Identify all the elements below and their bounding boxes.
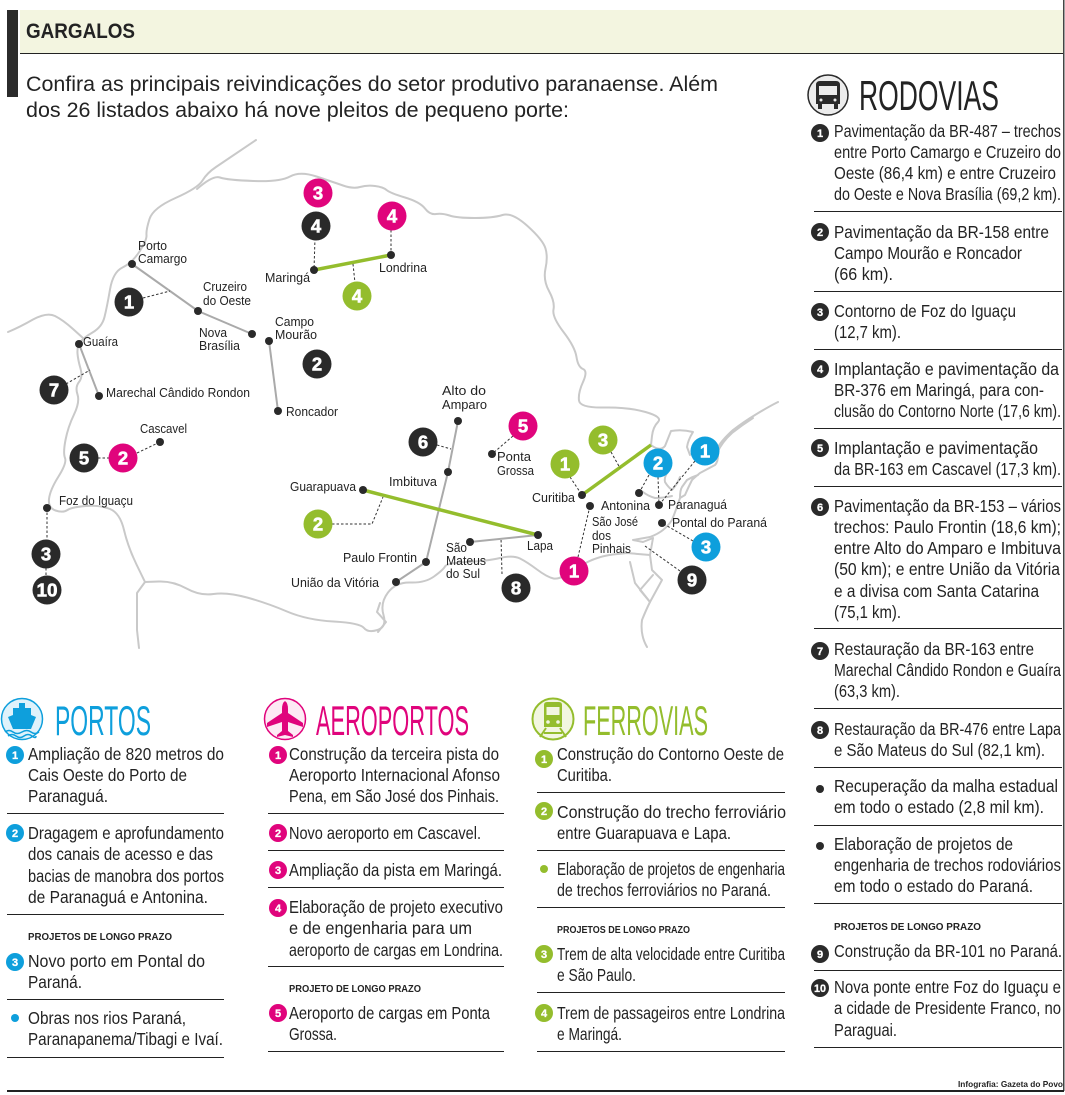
- item 1: Cais Oeste do Porto de: [28, 765, 187, 785]
- item 3: (12,7 km).: [834, 322, 901, 342]
- routes: [79, 255, 651, 582]
- item 1: [811, 121, 1061, 204]
- state and coast borders: [8, 140, 778, 648]
- city labels: São: [446, 540, 467, 555]
- item 4: aeroporto de cargas em Londrina.: [289, 940, 503, 960]
- item 1: [535, 744, 784, 785]
- airport number badges: [108, 178, 588, 586]
- city labels: Cascavel: [140, 421, 187, 436]
- city labels: Antonina: [601, 498, 651, 513]
- item 1: 1: [817, 128, 823, 140]
- item 4: Trem de passageiros entre Londrina: [557, 1003, 785, 1023]
- item 2: 2: [817, 227, 823, 239]
- item 3: Paraná.: [28, 972, 82, 992]
- item 1: Pena, em São José dos Pinhais.: [289, 786, 499, 806]
- map of Paraná: [8, 140, 778, 648]
- item 2: de Paranaguá e Antonina.: [28, 887, 208, 907]
- item 4: 4: [817, 364, 824, 376]
- road number badges: 10: [36, 580, 58, 600]
- city labels: Porto: [138, 238, 167, 253]
- rail number badges: 1: [560, 454, 570, 474]
- item: projetos ferroviários: [540, 859, 785, 900]
- city labels: Roncador: [286, 404, 339, 419]
- road number badges: 8: [511, 578, 521, 598]
- item 2: dos canais de acesso e das: [28, 844, 213, 864]
- city labels: São José: [592, 514, 638, 529]
- city labels: Lapa: [527, 538, 554, 553]
- item 3: 3: [275, 865, 281, 877]
- road number badges: 2: [312, 354, 322, 374]
- item 7: (63,3 km).: [834, 681, 900, 701]
- item 2: 2: [275, 828, 281, 840]
- item 1: 1: [275, 750, 281, 762]
- item 1: 1: [12, 750, 18, 762]
- item 1: Construção do Contorno Oeste de: [557, 744, 784, 764]
- item 1: Curitiba.: [557, 765, 612, 785]
- airport number badges: 2: [118, 448, 128, 468]
- city labels: Paranaguá: [668, 497, 728, 512]
- item: projetos rodoviários: [816, 834, 1061, 896]
- item 8: [811, 719, 1061, 760]
- item 4: [811, 359, 1061, 421]
- item 1: [6, 744, 224, 806]
- city labels: do Oeste: [203, 293, 251, 308]
- item 4: e de engenharia para um: [289, 918, 472, 938]
- item 1: Construção da terceira pista do: [289, 744, 499, 764]
- icon: plane: [264, 698, 306, 740]
- city labels: União da Vitória: [291, 575, 380, 590]
- item 2: 2: [541, 806, 547, 818]
- item 3: Ampliação da pista em Maringá.: [289, 860, 502, 880]
- city labels: Amparo: [442, 397, 487, 412]
- item 3: [6, 951, 205, 992]
- road number badges: 4: [311, 216, 322, 236]
- item: obras nos rios: Obras nos rios Paraná,: [28, 1008, 186, 1028]
- subheading: PROJETOS DE LONGO PRAZO: [28, 931, 172, 943]
- item 4: 4: [541, 1008, 548, 1020]
- city labels: Alto do: [442, 383, 486, 398]
- city labels: Guaíra: [83, 334, 119, 349]
- heading: portos: PORTOS: [55, 697, 151, 744]
- item 3: Trem de alta velocidade entre Curitiba: [557, 944, 785, 964]
- port number badges: [644, 436, 720, 562]
- item: projetos rodoviários: em todo o estado do Paraná.: [834, 876, 1033, 896]
- city labels: Imbituva: [389, 474, 438, 489]
- item 5: Grossa.: [289, 1024, 337, 1044]
- item 8: 8: [817, 725, 823, 737]
- item 2: Novo aeroporto em Cascavel.: [289, 823, 481, 843]
- item 3: 3: [541, 949, 547, 961]
- item 6: e a divisa com Santa Catarina: [834, 581, 1039, 601]
- city labels: Ponta: [497, 449, 532, 464]
- item 5: Aeroporto de cargas em Ponta: [289, 1003, 490, 1023]
- item 7: Restauração da BR-163 entre: [834, 639, 1034, 659]
- item 7: 7: [817, 646, 823, 658]
- leader lines: [46, 230, 695, 578]
- airport number badges: 4: [387, 206, 398, 226]
- item: obras nos rios: [11, 1008, 223, 1049]
- item 3: 3: [817, 307, 823, 319]
- city labels: Campo: [275, 314, 314, 329]
- item 6: (75,1 km).: [834, 602, 901, 622]
- subheading: PROJETO DE LONGO PRAZO: [289, 983, 421, 995]
- airport number badges: 1: [569, 560, 579, 582]
- icon: train: [532, 698, 574, 740]
- item 10: Paraguai.: [834, 1020, 897, 1040]
- item 4: [535, 1003, 785, 1044]
- road number badges: 6: [418, 432, 428, 452]
- subheading: PROJETOS DE LONGO PRAZO: [557, 924, 690, 936]
- city labels: Cruzeiro: [203, 279, 247, 294]
- item 2: [6, 823, 224, 907]
- item 2: Construção do trecho ferroviário: [557, 802, 786, 822]
- item: projetos ferroviários: Elaboração de projetos de engenharia: [557, 859, 785, 879]
- rules: rodovias: [814, 212, 1062, 1048]
- rail number badges: 3: [598, 430, 608, 450]
- item 7: [811, 639, 1061, 701]
- item 2: entre Guarapuava e Lapa.: [557, 823, 731, 843]
- item 1: 1: [541, 754, 547, 766]
- item: malha estadual: [816, 776, 1058, 817]
- item 4: 4: [275, 903, 282, 915]
- item 2: Dragagem e aprofundamento: [28, 823, 224, 843]
- item 2: bacias de manobra dos portos: [28, 866, 224, 886]
- intro text: dos 26 listados abaixo há nove pleitos de pequeno porte:: [26, 99, 569, 122]
- item 2: Campo Mourão e Roncador: [834, 243, 1022, 263]
- city labels: Londrina: [379, 260, 428, 275]
- rules: aeroportos: [268, 814, 504, 1052]
- road number badges: 9: [687, 570, 697, 590]
- port number badges: 2: [653, 452, 663, 474]
- item 5: 5: [275, 1008, 281, 1020]
- city labels: Guarapuava: [290, 479, 357, 494]
- item 2: [535, 802, 786, 843]
- city labels: Brasília: [199, 338, 241, 353]
- city labels: dos: [592, 528, 611, 543]
- airport number badges: 3: [313, 182, 323, 204]
- item 1: Paranaguá.: [28, 786, 108, 806]
- item 10: [811, 977, 1061, 1040]
- rail number badges: 4: [352, 286, 363, 306]
- item 5: [269, 1003, 490, 1044]
- icon: bus: [808, 75, 848, 115]
- item 3: Novo porto em Pontal do: [28, 951, 205, 971]
- item 10: 10: [814, 983, 826, 995]
- item: malha estadual: em todo o estado (2,8 mil km).: [834, 797, 1044, 817]
- panel: portos: [2, 697, 224, 1049]
- item 5: [811, 438, 1061, 479]
- port number badges: 3: [701, 536, 711, 558]
- item 3: 3: [12, 957, 18, 969]
- city labels: [59, 238, 768, 590]
- city labels: Nova: [199, 325, 228, 340]
- city labels: do Sul: [446, 566, 480, 581]
- icon: ship: [2, 698, 42, 740]
- city labels: Camargo: [138, 251, 187, 266]
- item 1: [269, 744, 500, 806]
- item 6: [811, 496, 1061, 622]
- item 4: Elaboração de projeto executivo: [289, 897, 503, 917]
- city labels: Grossa: [497, 463, 535, 478]
- item: obras nos rios: Paranapanema/Tibagi e Ivaí.: [28, 1029, 223, 1049]
- heading: aeroportos: AEROPORTOS: [316, 697, 469, 744]
- item 9: 9: [817, 949, 823, 961]
- panel: ferrovias: [532, 697, 786, 1044]
- item: projetos ferroviários: de trechos ferroviários no Paraná.: [557, 880, 771, 900]
- city labels: Mourão: [275, 327, 317, 342]
- city labels: Mateus: [446, 553, 486, 568]
- panel: rodovias: [808, 72, 1062, 1040]
- item 5: Implantação e pavimentação: [834, 438, 1038, 458]
- item: projetos rodoviários: Elaboração de projetos de: [834, 834, 1013, 854]
- road number badges: 3: [41, 544, 51, 564]
- city labels: Curitiba: [532, 490, 576, 505]
- item 3: e São Paulo.: [557, 965, 636, 985]
- bottom rule: [7, 1090, 1064, 1092]
- intro text: Confira as principais reivindicações do setor produtivo paranaense. Além: [26, 73, 718, 96]
- city labels: Maringá: [265, 270, 311, 285]
- road number badges: 5: [79, 448, 89, 468]
- item 3: Contorno de Foz do Iguaçu: [834, 301, 1016, 321]
- item 6: 6: [817, 502, 823, 514]
- rail number badges: [304, 282, 618, 538]
- item 1: Ampliação de 820 metros do: [28, 744, 224, 764]
- item 1: Aeroporto Internacional Afonso: [289, 765, 500, 785]
- city labels: Paulo Frontin: [343, 550, 417, 565]
- heading: ferrovias: FERROVIAS: [583, 697, 708, 744]
- rules: portos: [7, 814, 224, 1058]
- road number badges: [32, 212, 706, 604]
- road number badges: 1: [124, 292, 134, 312]
- item 4: [269, 897, 503, 960]
- city labels: Marechal Cândido Rondon: [106, 385, 250, 400]
- item 3: [535, 944, 785, 985]
- city labels: Foz do Iguaçu: [59, 493, 133, 508]
- city labels: Pinhais: [592, 541, 631, 556]
- rules: ferrovias: [537, 792, 785, 1052]
- panel: aeroportos: [264, 697, 503, 1044]
- item 2: 2: [12, 828, 18, 840]
- airport number badges: 5: [518, 416, 528, 436]
- subheading: PROJETOS DE LONGO PRAZO: [834, 921, 981, 933]
- title: GARGALOS: [26, 20, 135, 43]
- rail number badges: 2: [313, 514, 323, 534]
- item 2: (66 km).: [834, 264, 893, 284]
- intro text: [26, 73, 718, 122]
- item 5: 5: [817, 443, 823, 455]
- city dots: [43, 251, 666, 586]
- credit: Infografia: Gazeta do Povo: [958, 1079, 1063, 1089]
- road number badges: 7: [49, 380, 59, 400]
- item 4: e Maringá.: [557, 1024, 622, 1044]
- port number badges: 1: [700, 440, 710, 462]
- item 2: [811, 222, 1049, 284]
- city labels: Pontal do Paraná: [672, 515, 768, 530]
- item 3: [811, 301, 1016, 342]
